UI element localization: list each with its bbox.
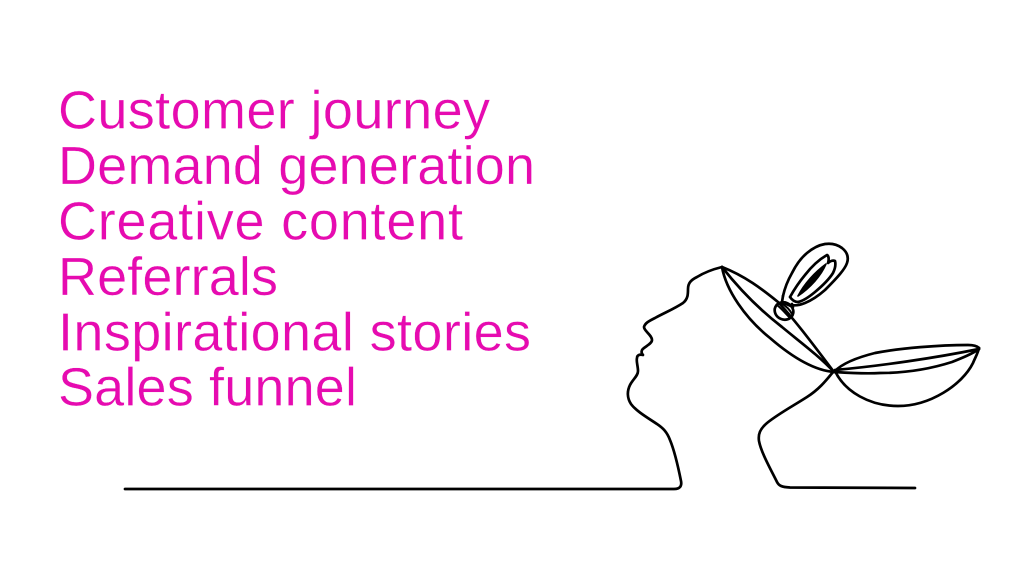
- bulb screw thread: [777, 303, 792, 318]
- list item: Creative content: Creative content: [58, 192, 463, 252]
- head profile with baseline: [125, 267, 722, 489]
- opened skull: lower flap: [722, 267, 834, 372]
- list item: Sales funnel: Sales funnel: [58, 358, 357, 418]
- bulb screw base: [772, 299, 796, 323]
- bulb glass: [783, 244, 848, 305]
- bulb inner stem: [798, 264, 826, 296]
- opened skull: right bowl top edge: [835, 345, 979, 371]
- list item: Demand generation: Demand generation: [58, 136, 535, 196]
- illustration: open head with light bulb, single line drawing: [125, 244, 979, 489]
- opened skull: right bowl middle line: [835, 349, 979, 370]
- bulb collar: [782, 296, 793, 307]
- opened skull: right bowl inner lower edge: [835, 349, 979, 373]
- list item: Customer journey: Customer journey: [58, 80, 490, 140]
- text block: marketing topics list: [58, 80, 535, 418]
- list item: Referrals: Referrals: [58, 247, 278, 307]
- list item: Inspirational stories: Inspirational stories: [58, 302, 531, 362]
- opened skull: middle line: [722, 267, 834, 372]
- back of neck with baseline: [759, 372, 915, 488]
- opened skull: upper flap: [722, 267, 834, 372]
- bulb filament: [790, 255, 835, 302]
- opened skull: right bowl underside: [835, 348, 979, 406]
- icon: light bulb: [772, 244, 848, 323]
